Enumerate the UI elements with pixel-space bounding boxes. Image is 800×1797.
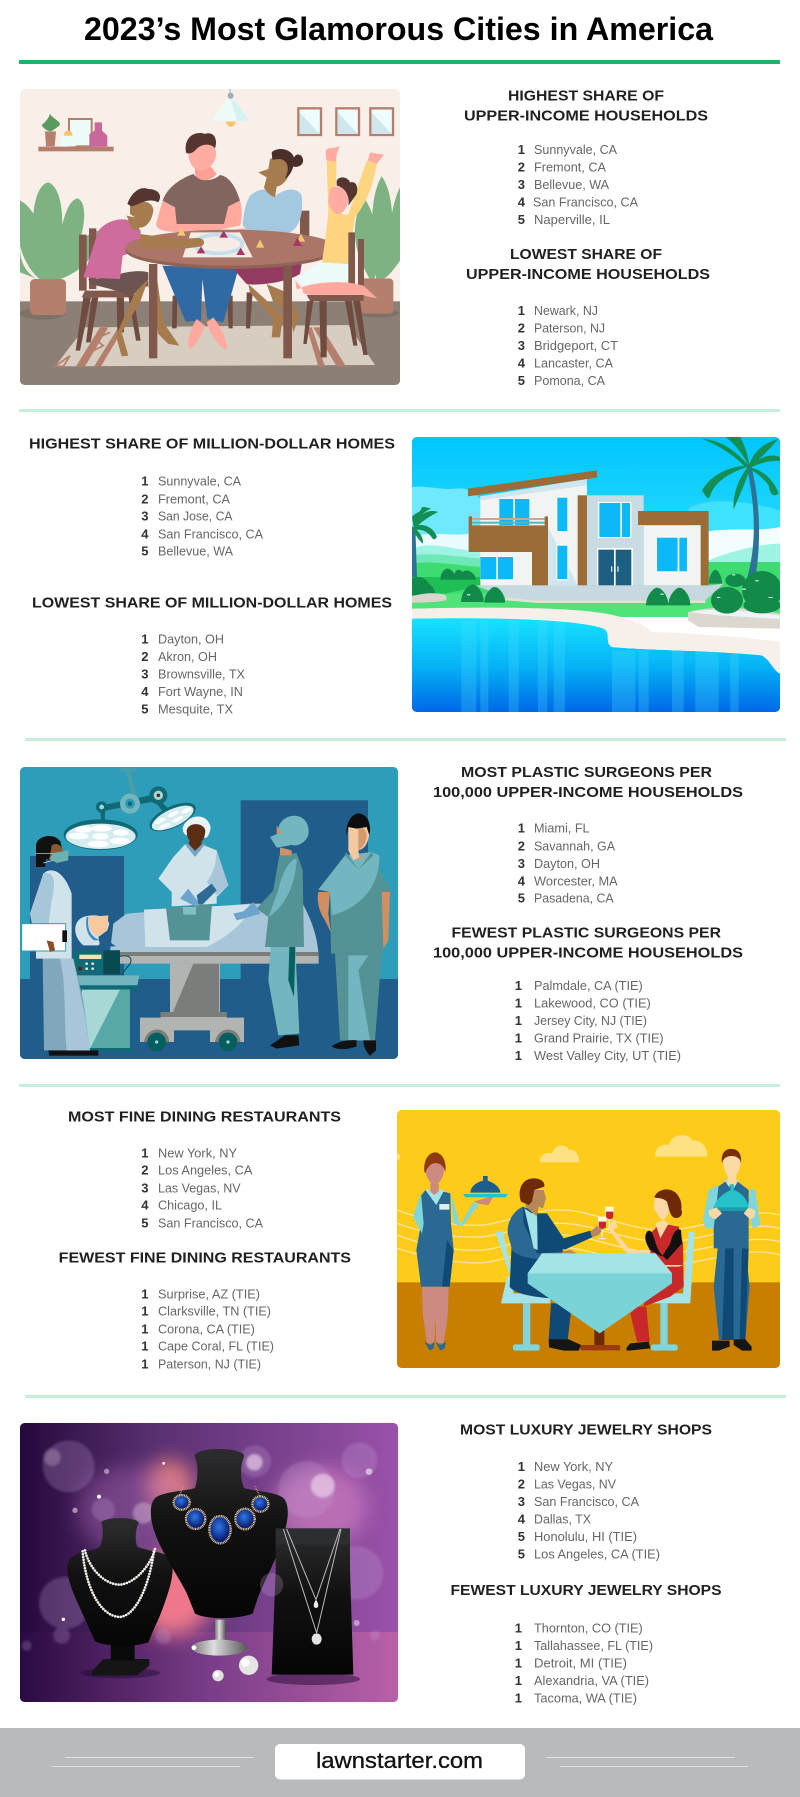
list: fewest luxury jewelry shops: 1 bbox=[515, 1620, 522, 1635]
list: most luxury jewelry shops: New York, NY bbox=[534, 1459, 613, 1474]
list: most plastic surgeons bbox=[518, 821, 618, 906]
heading: highest share upper-income: HIGHEST SHARE OF bbox=[508, 88, 664, 105]
illustration: family playing a board game bbox=[20, 89, 400, 385]
list: most plastic surgeons: Savannah, GA bbox=[534, 838, 615, 853]
list: lowest share upper-income: 5 bbox=[518, 373, 525, 388]
list: highest share million-dollar homes: 2 bbox=[141, 491, 148, 506]
list: highest share upper-income: 2 bbox=[518, 160, 525, 175]
list: highest share million-dollar homes: Fremont, CA bbox=[158, 491, 230, 506]
list: lowest share upper-income: Newark, NJ bbox=[534, 303, 598, 318]
list: fewest fine dining: 1 bbox=[141, 1304, 148, 1319]
list: fewest fine dining: 1 bbox=[141, 1286, 148, 1301]
list: highest share million-dollar homes: San Francisco, CA bbox=[158, 526, 263, 541]
list: most plastic surgeons: Worcester, MA bbox=[534, 873, 618, 888]
list: fewest luxury jewelry shops: Detroit, MI (TIE) bbox=[534, 1655, 627, 1670]
heading: fewest plastic surgeons bbox=[433, 924, 743, 961]
list: highest share million-dollar homes bbox=[141, 474, 263, 559]
list: fewest plastic surgeons: 1 bbox=[515, 978, 522, 993]
list: most fine dining: 2 bbox=[141, 1163, 148, 1178]
heading: most fine dining: MOST FINE DINING RESTAURANTS bbox=[68, 1108, 341, 1125]
list: lowest share million-dollar homes: 2 bbox=[141, 649, 148, 664]
list: most fine dining: New York, NY bbox=[158, 1145, 237, 1160]
panel: upper-income households bbox=[464, 88, 710, 388]
list: most fine dining: 3 bbox=[141, 1180, 148, 1195]
list: most plastic surgeons: 5 bbox=[518, 891, 525, 906]
heading: lowest share upper-income bbox=[466, 246, 710, 283]
footer website: lawnstarter.com bbox=[316, 1748, 483, 1773]
list: fewest luxury jewelry shops bbox=[515, 1620, 653, 1705]
list: highest share upper-income: San Francisco, CA bbox=[533, 195, 638, 210]
heading: most plastic surgeons bbox=[433, 764, 743, 801]
list: most luxury jewelry shops: 5 bbox=[518, 1546, 525, 1561]
list: fewest plastic surgeons: 1 bbox=[515, 995, 522, 1010]
list: most luxury jewelry shops: 3 bbox=[518, 1494, 525, 1509]
list: lowest share upper-income: Pomona, CA bbox=[534, 373, 605, 388]
illustration: modern house with pool bbox=[412, 437, 780, 712]
title: 2023’s Most Glamorous Cities in America bbox=[84, 11, 713, 47]
list: fewest plastic surgeons: Jersey City, NJ (TIE) bbox=[534, 1013, 647, 1028]
list: highest share upper-income: 3 bbox=[518, 177, 525, 192]
list: most luxury jewelry shops: Los Angeles, CA (TIE) bbox=[534, 1546, 660, 1561]
list: fewest plastic surgeons: 1 bbox=[515, 1048, 522, 1063]
list: fewest fine dining: Cape Coral, FL (TIE) bbox=[158, 1339, 274, 1354]
list: most luxury jewelry shops bbox=[518, 1459, 660, 1561]
list: most luxury jewelry shops: San Francisco, CA bbox=[534, 1494, 639, 1509]
list: fewest fine dining: 1 bbox=[141, 1339, 148, 1354]
list: most luxury jewelry shops: 1 bbox=[518, 1459, 525, 1474]
list: highest share upper-income bbox=[518, 142, 638, 227]
panel: fine dining restaurants bbox=[59, 1108, 351, 1371]
panel: luxury jewelry shops bbox=[450, 1421, 722, 1705]
list: highest share million-dollar homes: 1 bbox=[141, 474, 148, 489]
list: most luxury jewelry shops: Honolulu, HI (TIE) bbox=[534, 1529, 637, 1544]
illustration: jewelry on display busts bbox=[20, 1423, 398, 1702]
list: lowest share upper-income: 4 bbox=[518, 355, 526, 370]
list: highest share upper-income: Naperville, IL bbox=[534, 212, 610, 227]
list: lowest share upper-income: Lancaster, CA bbox=[534, 355, 613, 370]
list: highest share million-dollar homes: 3 bbox=[141, 509, 148, 524]
list: fewest plastic surgeons: 1 bbox=[515, 1013, 522, 1028]
list: most plastic surgeons: 3 bbox=[518, 856, 525, 871]
list: most fine dining: 4 bbox=[141, 1198, 149, 1213]
list: lowest share million-dollar homes: Mesquite, TX bbox=[158, 701, 233, 716]
list: fewest fine dining: Clarksville, TN (TIE) bbox=[158, 1304, 271, 1319]
list: lowest share upper-income: Bridgeport, CT bbox=[534, 338, 618, 353]
list: lowest share upper-income: 1 bbox=[518, 303, 525, 318]
list: lowest share million-dollar homes: Fort Wayne, IN bbox=[158, 684, 243, 699]
heading: most luxury jewelry shops: MOST LUXURY JEWELRY SHOPS bbox=[460, 1421, 712, 1438]
list: most fine dining bbox=[141, 1145, 263, 1230]
list: fewest fine dining: 1 bbox=[141, 1321, 148, 1336]
list: highest share upper-income: Sunnyvale, CA bbox=[534, 142, 617, 157]
illustration: fine dining couple and waiters bbox=[397, 1110, 780, 1368]
list: fewest plastic surgeons: Lakewood, CO (TIE) bbox=[534, 995, 651, 1010]
list: highest share upper-income: 1 bbox=[518, 142, 525, 157]
list: fewest plastic surgeons: West Valley City, UT (TIE) bbox=[534, 1048, 681, 1063]
list: fewest fine dining bbox=[141, 1286, 274, 1371]
list: most fine dining: 5 bbox=[141, 1215, 148, 1230]
list: fewest plastic surgeons: 1 bbox=[515, 1030, 522, 1045]
list: fewest luxury jewelry shops: 1 bbox=[515, 1638, 522, 1653]
heading: lowest share million-dollar homes: LOWEST SHARE OF MILLION-DOLLAR HOMES bbox=[32, 594, 392, 611]
list: lowest share million-dollar homes: 4 bbox=[141, 684, 149, 699]
list: most luxury jewelry shops: 4 bbox=[518, 1512, 526, 1527]
list: highest share million-dollar homes: Bellevue, WA bbox=[158, 544, 233, 559]
heading: fewest plastic surgeons: 100,000 UPPER-INCOME HOUSEHOLDS bbox=[433, 944, 743, 961]
list: most plastic surgeons: 2 bbox=[518, 838, 525, 853]
list: most fine dining: San Francisco, CA bbox=[158, 1215, 263, 1230]
heading: lowest share upper-income: LOWEST SHARE OF bbox=[510, 246, 662, 263]
list: highest share upper-income: Bellevue, WA bbox=[534, 177, 609, 192]
list: lowest share upper-income bbox=[518, 303, 618, 388]
list: lowest share million-dollar homes: Dayton, OH bbox=[158, 631, 224, 646]
list: fewest plastic surgeons: Palmdale, CA (TIE) bbox=[534, 978, 643, 993]
list: lowest share million-dollar homes bbox=[141, 631, 245, 716]
list: fewest fine dining: Surprise, AZ (TIE) bbox=[158, 1286, 260, 1301]
list: fewest fine dining: 1 bbox=[141, 1356, 148, 1371]
heading: lowest share upper-income: UPPER-INCOME HOUSEHOLDS bbox=[466, 266, 710, 283]
list: lowest share million-dollar homes: 1 bbox=[141, 631, 148, 646]
list: most fine dining: 1 bbox=[141, 1145, 148, 1160]
heading: fewest plastic surgeons: FEWEST PLASTIC SURGEONS PER bbox=[452, 924, 721, 941]
list: lowest share upper-income: Paterson, NJ bbox=[534, 320, 605, 335]
list: highest share upper-income: 5 bbox=[518, 212, 525, 227]
list: most fine dining: Chicago, IL bbox=[158, 1198, 222, 1213]
heading: highest share million-dollar homes: HIGHEST SHARE OF MILLION-DOLLAR HOMES bbox=[29, 435, 395, 452]
list: fewest luxury jewelry shops: Tacoma, WA (TIE) bbox=[534, 1690, 637, 1705]
list: most fine dining: Las Vegas, NV bbox=[158, 1180, 241, 1195]
list: most plastic surgeons: Miami, FL bbox=[534, 821, 590, 836]
list: most plastic surgeons: 1 bbox=[518, 821, 525, 836]
list: fewest plastic surgeons: Grand Prairie, TX (TIE) bbox=[534, 1030, 664, 1045]
list: most plastic surgeons: Pasadena, CA bbox=[534, 891, 614, 906]
list: highest share upper-income: Fremont, CA bbox=[534, 160, 606, 175]
heading: highest share upper-income: UPPER-INCOME HOUSEHOLDS bbox=[464, 108, 708, 125]
list: lowest share upper-income: 3 bbox=[518, 338, 525, 353]
list: most fine dining: Los Angeles, CA bbox=[158, 1163, 253, 1178]
list: fewest luxury jewelry shops: Tallahassee, FL (TIE) bbox=[534, 1638, 653, 1653]
illustration: operating room bbox=[20, 767, 398, 1059]
heading: most plastic surgeons: MOST PLASTIC SURGEONS PER bbox=[461, 764, 712, 781]
list: fewest luxury jewelry shops: Thornton, CO (TIE) bbox=[534, 1620, 643, 1635]
list: highest share million-dollar homes: 4 bbox=[141, 526, 149, 541]
list: highest share upper-income: 4 bbox=[518, 195, 526, 210]
list: fewest fine dining: Corona, CA (TIE) bbox=[158, 1321, 255, 1336]
list: highest share million-dollar homes: Sunnyvale, CA bbox=[158, 474, 241, 489]
list: lowest share million-dollar homes: 5 bbox=[141, 701, 148, 716]
heading: most plastic surgeons: 100,000 UPPER-INCOME HOUSEHOLDS bbox=[433, 784, 743, 801]
list: most luxury jewelry shops: 5 bbox=[518, 1529, 525, 1544]
panel: plastic surgeons bbox=[433, 764, 743, 1063]
list: most plastic surgeons: Dayton, OH bbox=[534, 856, 600, 871]
list: most luxury jewelry shops: Las Vegas, NV bbox=[534, 1477, 616, 1492]
list: fewest luxury jewelry shops: 1 bbox=[515, 1655, 522, 1670]
list: most luxury jewelry shops: Dallas, TX bbox=[534, 1512, 591, 1527]
heading: fewest fine dining: FEWEST FINE DINING RESTAURANTS bbox=[59, 1249, 351, 1266]
list: fewest luxury jewelry shops: Alexandria, VA (TIE) bbox=[534, 1673, 649, 1688]
list: highest share million-dollar homes: 5 bbox=[141, 544, 148, 559]
list: fewest plastic surgeons bbox=[515, 978, 681, 1063]
list: fewest luxury jewelry shops: 1 bbox=[515, 1690, 522, 1705]
list: lowest share upper-income: 2 bbox=[518, 320, 525, 335]
list: lowest share million-dollar homes: 3 bbox=[141, 666, 148, 681]
footer bbox=[0, 1728, 800, 1797]
list: highest share million-dollar homes: San Jose, CA bbox=[158, 509, 233, 524]
list: lowest share million-dollar homes: Akron, OH bbox=[158, 649, 217, 664]
list: most plastic surgeons: 4 bbox=[518, 873, 526, 888]
heading: fewest luxury jewelry shops: FEWEST LUXURY JEWELRY SHOPS bbox=[450, 1582, 722, 1599]
list: most luxury jewelry shops: 2 bbox=[518, 1477, 525, 1492]
list: lowest share million-dollar homes: Brownsville, TX bbox=[158, 666, 245, 681]
heading: highest share upper-income bbox=[464, 88, 708, 125]
list: fewest fine dining: Paterson, NJ (TIE) bbox=[158, 1356, 261, 1371]
panel: million-dollar homes bbox=[29, 435, 395, 716]
list: fewest luxury jewelry shops: 1 bbox=[515, 1673, 522, 1688]
